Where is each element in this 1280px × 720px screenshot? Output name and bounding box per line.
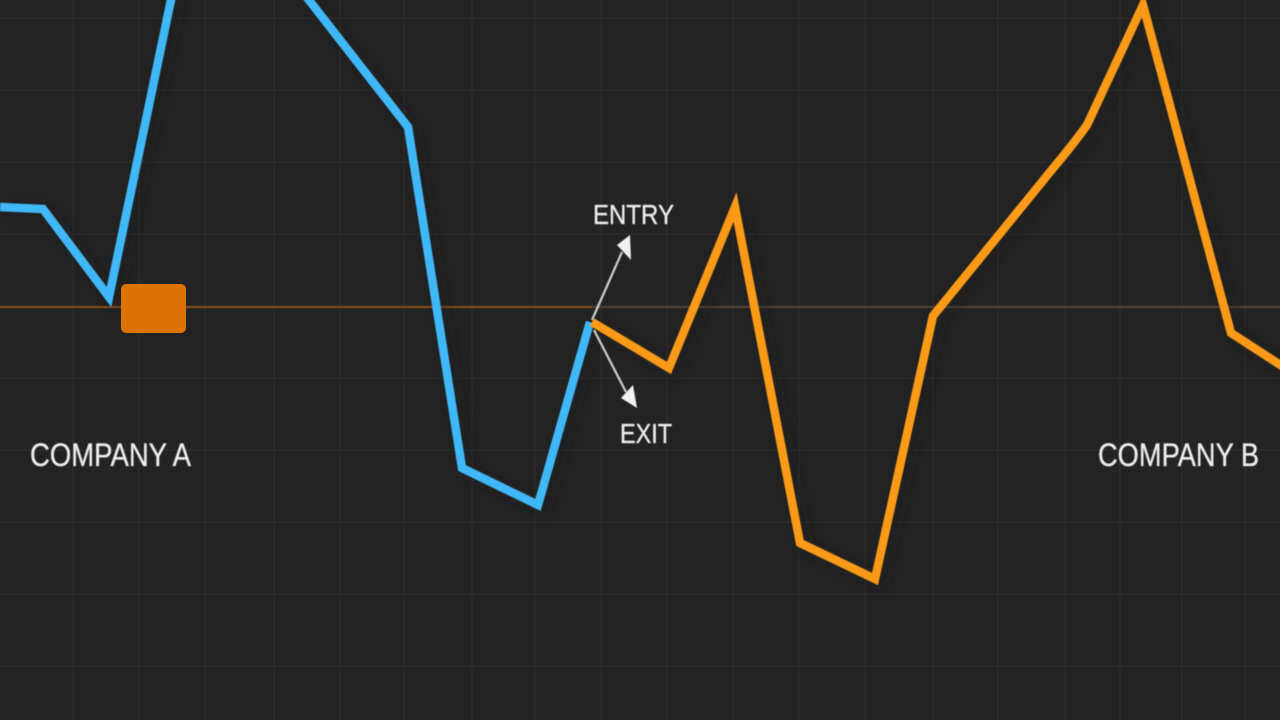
label: entry: ENTRY — [593, 199, 674, 230]
arrow: exit — [594, 330, 637, 408]
label: exit: EXIT — [620, 418, 672, 449]
baseline — [0, 306, 592, 308]
arrow: entry — [592, 235, 631, 320]
orange marker — [121, 284, 186, 333]
label: company A: COMPANY A — [30, 437, 192, 473]
company B line — [592, 5, 1280, 579]
company A line — [0, 0, 590, 505]
